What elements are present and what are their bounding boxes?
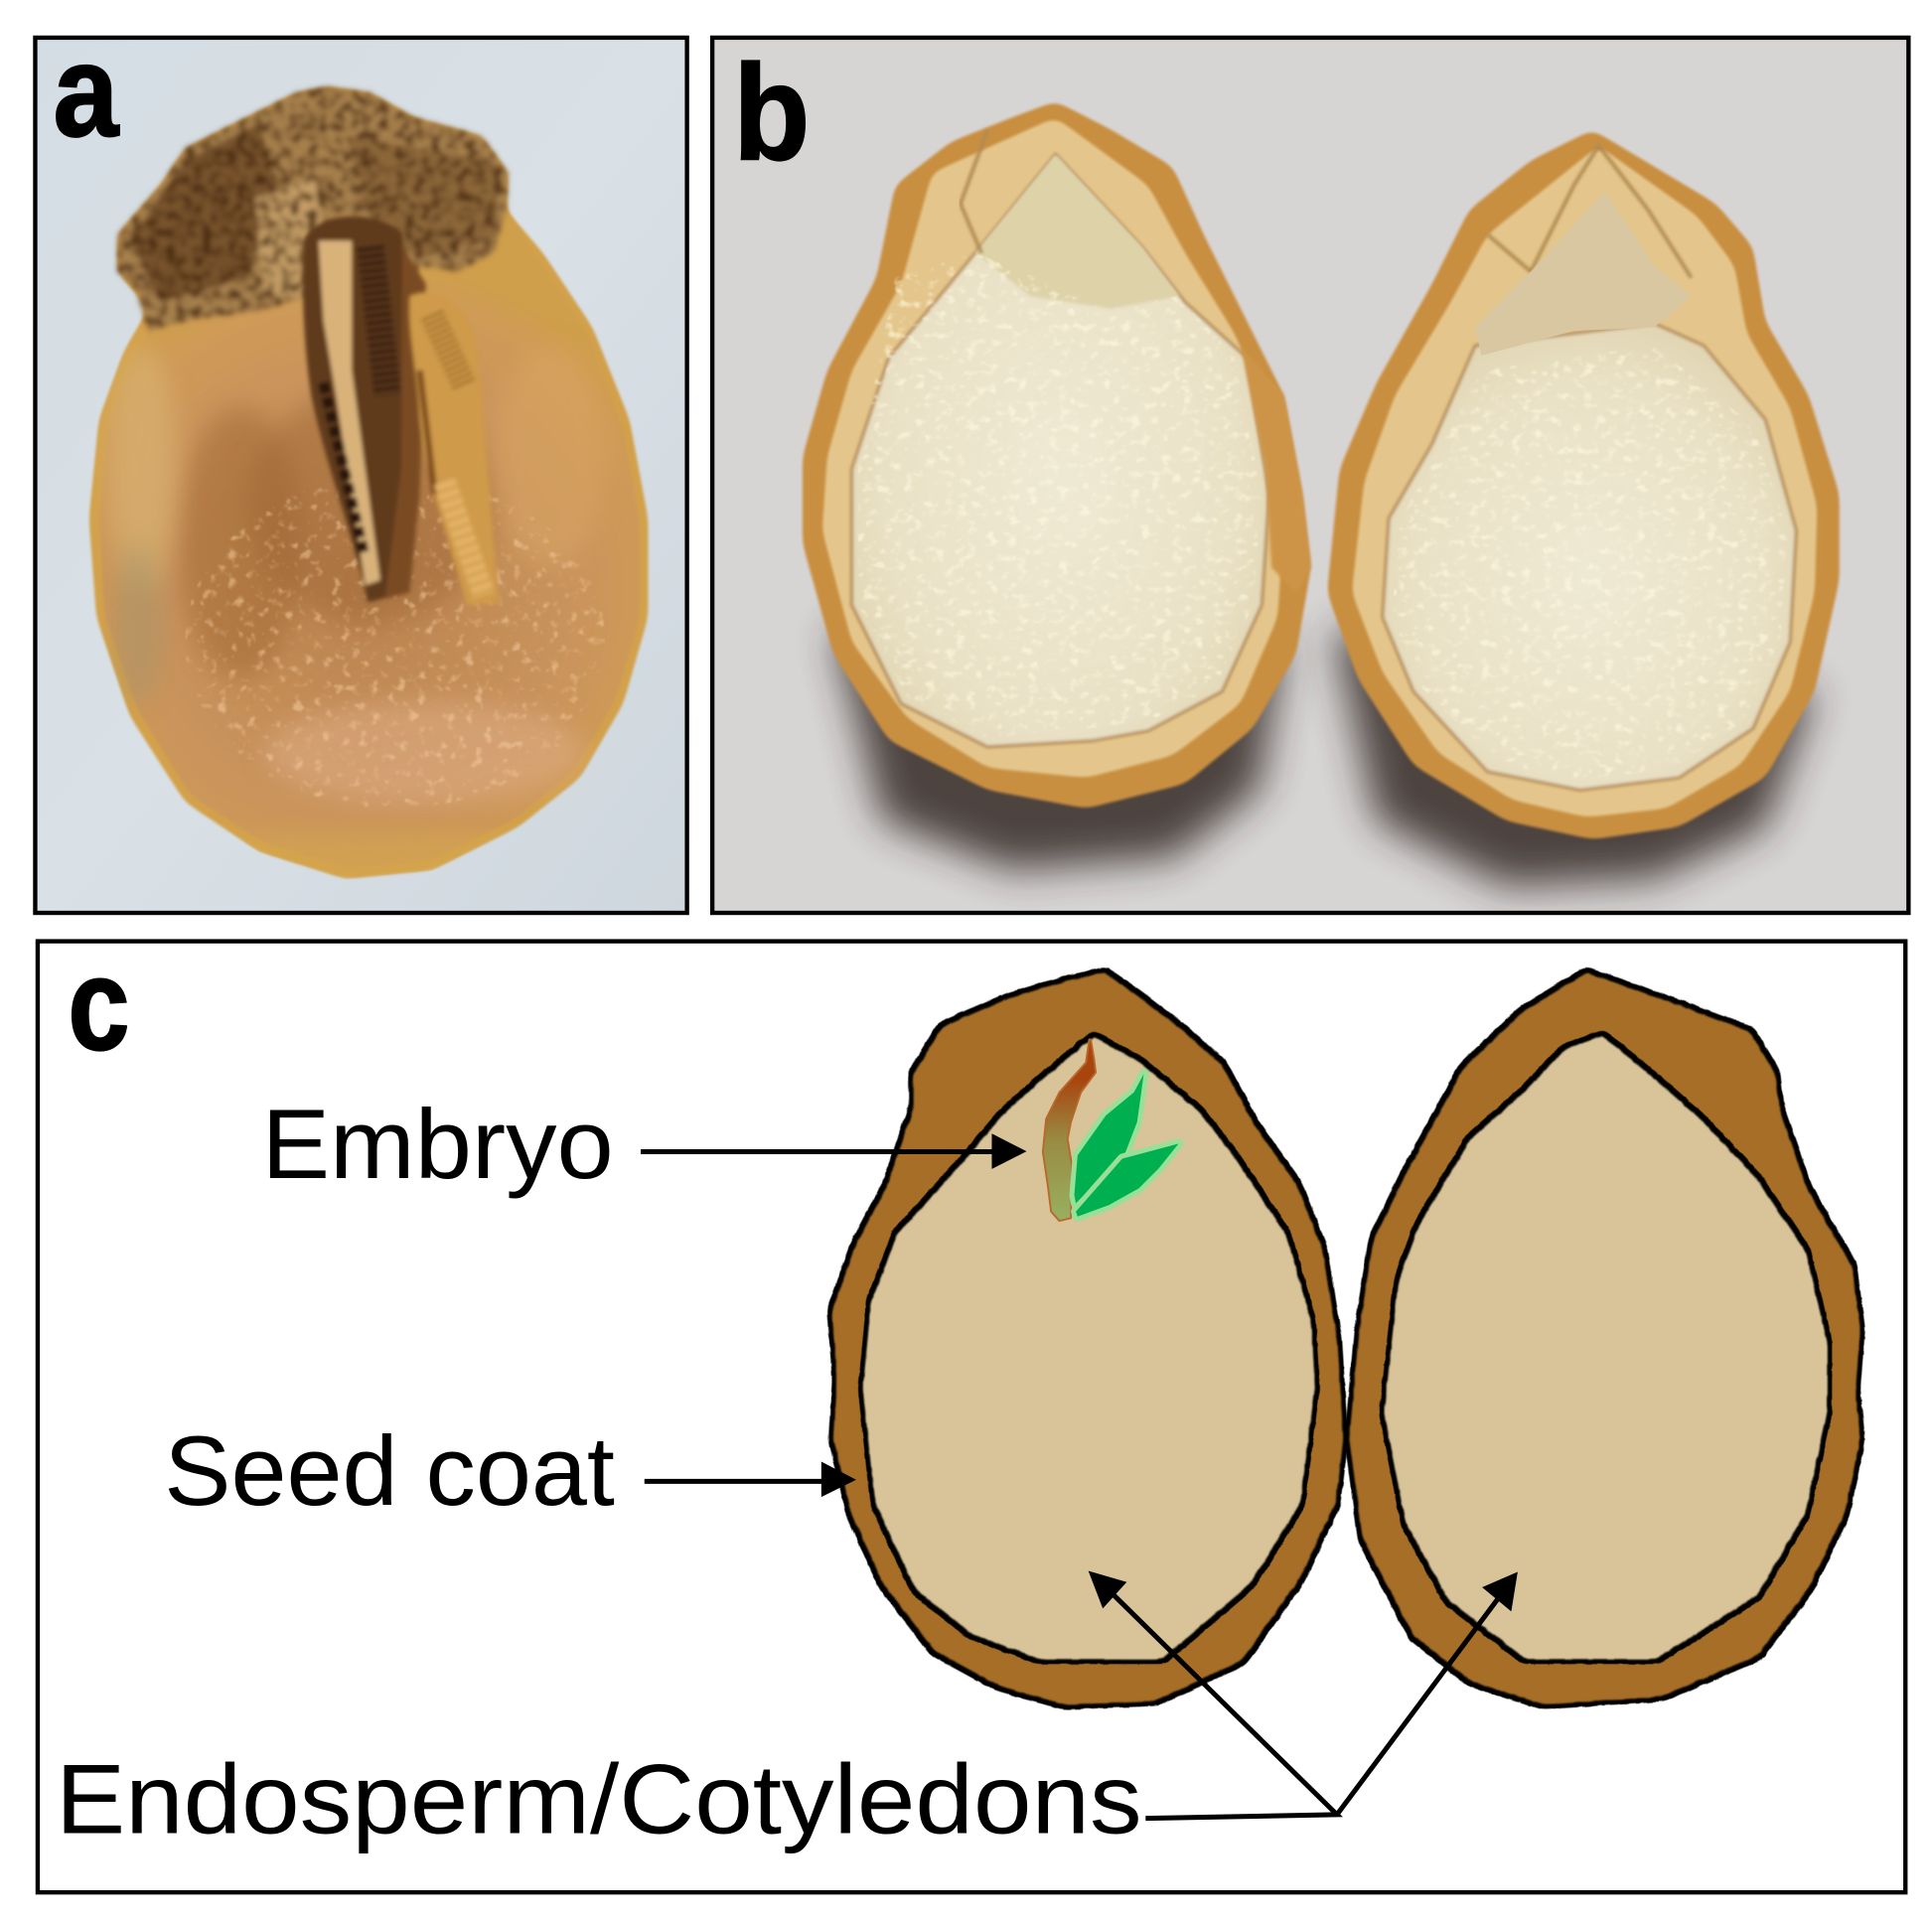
label b: b (733, 36, 810, 188)
right half seed (1327, 129, 1840, 839)
panel a: whole seed photo (35, 18, 687, 913)
arrows: endosperm and cotyledons (1089, 1571, 1518, 1819)
diagram left seed (827, 966, 1348, 1709)
icon: embryo (1043, 1039, 1179, 1221)
label: Seed coat: Seed coat (164, 1416, 615, 1527)
seed a body (89, 86, 648, 885)
panel b: halved seed photo (712, 36, 1908, 913)
seed a dark cap (117, 86, 509, 331)
arrow: seed coat (645, 1461, 856, 1497)
seed shadows (833, 630, 1815, 886)
label: Embryo: Embryo (261, 1090, 614, 1200)
label a: a (53, 18, 120, 164)
panel c: labelled diagram (38, 931, 1905, 1892)
label: Endosperm/Cotyledons: Endosperm/Cotyledons (56, 1745, 1142, 1855)
diagram right seed (1344, 966, 1865, 1709)
seed a embryo grooves (303, 217, 499, 605)
arrow: embryo (641, 1133, 1027, 1169)
tan embryo patch (1475, 192, 1692, 356)
label c: c (68, 931, 130, 1077)
left half seed (803, 101, 1311, 809)
